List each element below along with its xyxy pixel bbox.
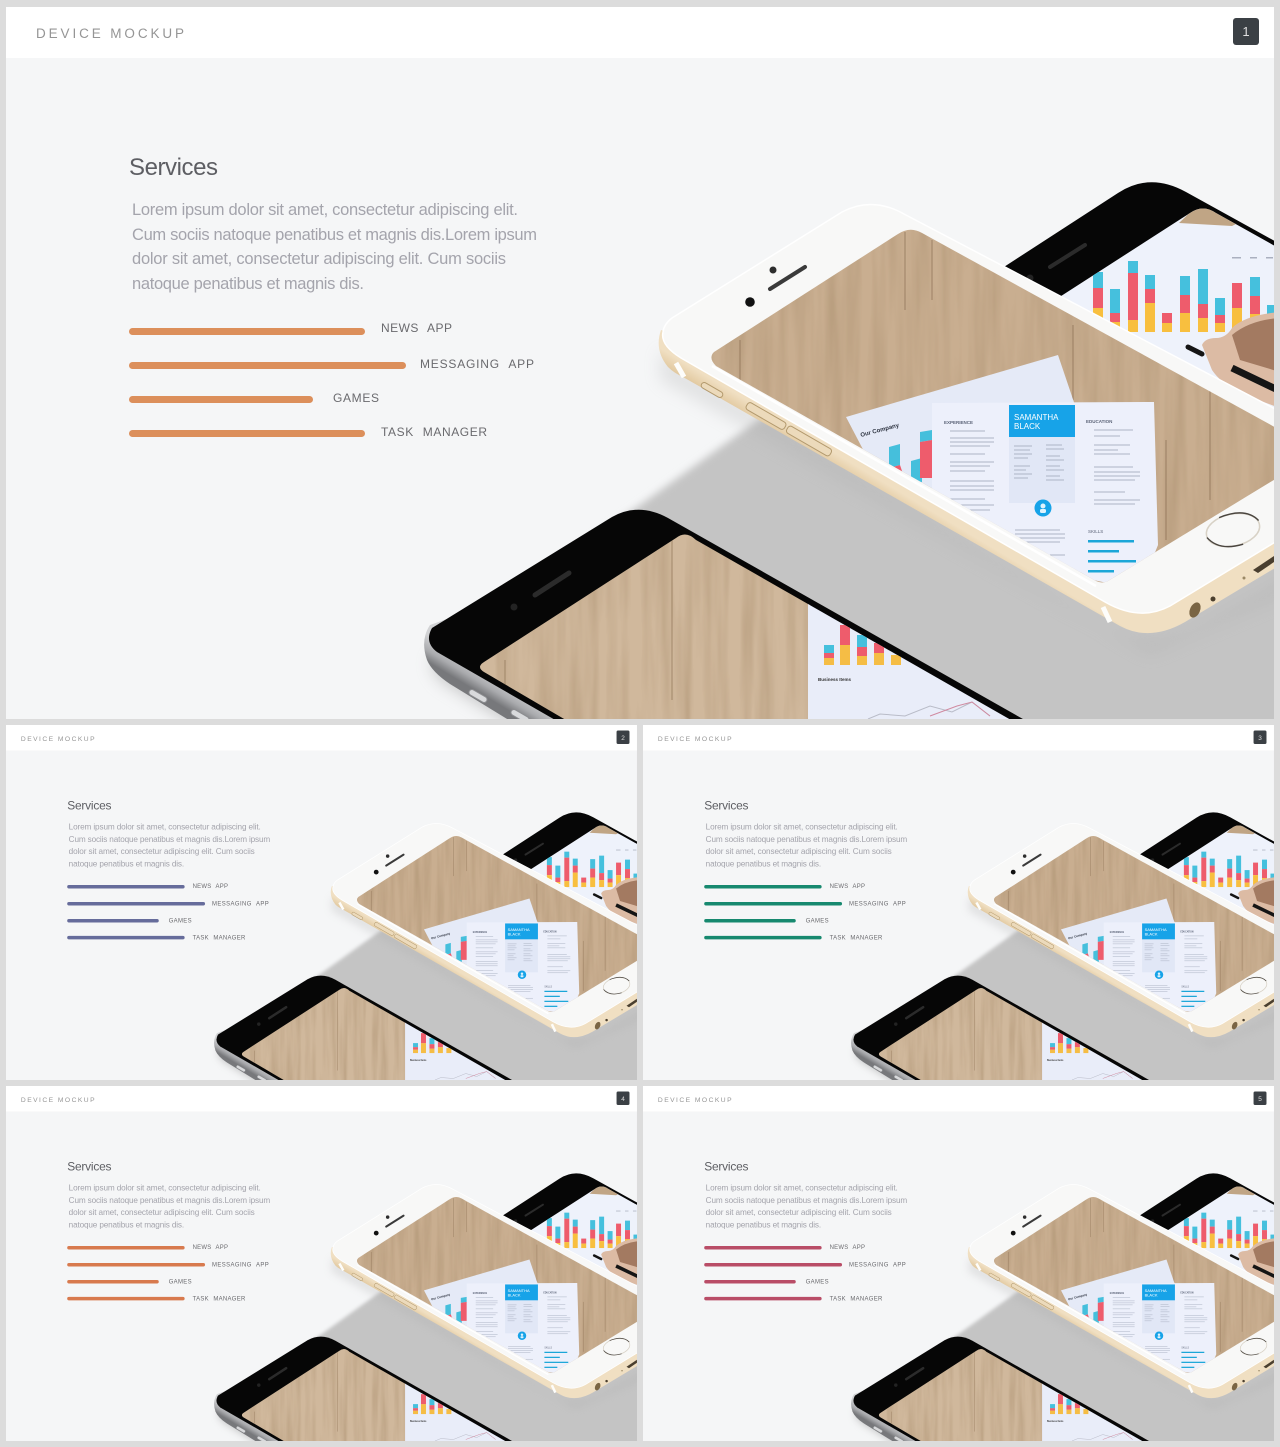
bar: news app: NEWS APP (381, 321, 452, 335)
body text (132, 201, 537, 293)
service bars list: NEWS APP (830, 1245, 865, 1251)
diagonal grey shadow (560, 400, 1280, 770)
body text: Lorem ipsum dolor sit amet, consectetur adipiscing elit. (69, 822, 261, 831)
home button (1203, 509, 1263, 551)
body text: natoque penatibus et magnis dis. (706, 1220, 821, 1229)
black phone, lower left: Business Items (818, 677, 852, 682)
body text: natoque penatibus et magnis dis. (706, 859, 821, 868)
body text: Cum sociis natoque penatibus et magnis dis.Lorem ipsum (706, 1196, 907, 1205)
service bars list: NEWS APP (193, 884, 228, 890)
body text: dolor sit amet, consectetur adipiscing elit. Cum sociis (706, 847, 892, 856)
bar: games: GAMES (333, 391, 379, 405)
gold phone: EDUCATION (1086, 419, 1112, 424)
black phone, lower left (424, 510, 1060, 740)
body text: Lorem ipsum dolor sit amet, consectetur adipiscing elit. (69, 1183, 261, 1192)
body text (69, 1183, 270, 1229)
service bars list: GAMES (806, 919, 829, 925)
body text: Lorem ipsum dolor sit amet, consectetur adipiscing elit. (706, 1183, 898, 1192)
slide 2: device mockup, indigo (6, 725, 665, 1105)
page number badge (1254, 1091, 1266, 1105)
page number badge: 4 (621, 1096, 625, 1103)
bar: task manager (129, 425, 487, 439)
bottom ports (1187, 601, 1203, 619)
slide 1: device mockup, orange (6, 7, 1280, 770)
gold phone: EXPERIENCE (944, 420, 973, 425)
header bar: DEVICE MOCKUP (658, 1097, 732, 1104)
bar: games (129, 391, 379, 405)
page number badge: 2 (621, 735, 625, 742)
illustration: isometric phones (851, 812, 1280, 1105)
body text: natoque penatibus et magnis dis. (69, 1220, 184, 1229)
header bar (6, 1086, 637, 1111)
illustration: isometric phones (214, 1173, 665, 1447)
header bar (643, 1086, 1274, 1111)
header bar: DEVICE MOCKUP (658, 736, 732, 743)
service bars list: NEWS APP (193, 1245, 228, 1251)
heading: Services (67, 1160, 112, 1174)
gold phone: Our Company (860, 423, 900, 439)
page number badge: 3 (1258, 735, 1262, 742)
heading: Services (704, 799, 749, 813)
service bars list: GAMES (806, 1280, 829, 1286)
heading: Services (704, 1160, 749, 1174)
service bars list: MESSAGING APP (849, 1263, 906, 1269)
service bars list: TASK MANAGER (830, 1297, 883, 1303)
gold phone: BLACK (1014, 422, 1041, 431)
earpiece and camera (770, 267, 805, 289)
service bars list (704, 1245, 906, 1303)
service bars list: NEWS APP (830, 884, 865, 890)
header bar: DEVICE MOCKUP (36, 26, 184, 41)
body text: Cum sociis natoque penatibus et magnis dis.Lorem ipsum (69, 835, 270, 844)
gold phone: SAMANTHA (1014, 413, 1059, 422)
slide 5: device mockup, crimson (643, 1086, 1280, 1447)
service bars list (67, 1245, 269, 1303)
gold phone: SKILLS (1088, 529, 1103, 534)
body text (706, 1183, 907, 1229)
page number badge (617, 730, 629, 744)
service bars list (704, 884, 906, 942)
body text (706, 822, 907, 868)
body text: dolor sit amet, consectetur adipiscing elit. Cum sociis (69, 847, 255, 856)
illustration: isometric phones (851, 1173, 1280, 1447)
bar: news app (129, 321, 452, 335)
slide 4: device mockup, burnt orange (6, 1086, 665, 1447)
body text: Cum sociis natoque penatibus et magnis dis.Lorem ipsum (706, 835, 907, 844)
service bars list: MESSAGING APP (212, 902, 269, 908)
page number badge (1254, 730, 1266, 744)
illustration: isometric phones (424, 182, 1280, 770)
page number badge (617, 1091, 629, 1105)
black phone, upper right (990, 182, 1280, 440)
service bars list: GAMES (169, 919, 192, 925)
service bars list: TASK MANAGER (193, 936, 246, 942)
page number badge (1233, 18, 1259, 45)
illustration: isometric phones (214, 812, 665, 1105)
bar: task manager: TASK MANAGER (381, 425, 487, 439)
service bars list (67, 884, 269, 942)
bar: messaging app: MESSAGING APP (420, 357, 534, 371)
side buttons and antenna bands (700, 381, 833, 457)
body text: dolor sit amet, consectetur adipiscing elit. Cum sociis (706, 1208, 892, 1217)
page number badge: 1 (1242, 24, 1250, 39)
body text (69, 822, 270, 868)
heading: Services (129, 154, 218, 181)
header bar: DEVICE MOCKUP (21, 736, 95, 743)
header bar (6, 725, 637, 750)
body text: dolor sit amet, consectetur adipiscing elit. Cum sociis (132, 250, 506, 268)
pen tip (1188, 347, 1202, 354)
service bars list (129, 321, 534, 439)
heading: Services (67, 799, 112, 813)
soft shadow of gold phone (660, 350, 1280, 655)
service bars list: MESSAGING APP (212, 1263, 269, 1269)
body text: Cum sociis natoque penatibus et magnis dis.Lorem ipsum (69, 1196, 270, 1205)
body text: natoque penatibus et magnis dis. (132, 275, 364, 293)
hand holding pen (1202, 312, 1280, 410)
slide background (6, 7, 1274, 719)
service bars list: GAMES (169, 1280, 192, 1286)
body text: Cum sociis natoque penatibus et magnis dis.Lorem ipsum (132, 226, 537, 244)
body text: Lorem ipsum dolor sit amet, consectetur adipiscing elit. (706, 822, 898, 831)
bar: messaging app (129, 357, 534, 371)
body text: Lorem ipsum dolor sit amet, consectetur adipiscing elit. (132, 201, 518, 219)
slide 3: device mockup, green (643, 725, 1280, 1105)
service bars list: MESSAGING APP (849, 902, 906, 908)
header bar (643, 725, 1274, 750)
service bars list: TASK MANAGER (193, 1297, 246, 1303)
service bars list: TASK MANAGER (830, 936, 883, 942)
page number badge: 5 (1258, 1096, 1262, 1103)
header bar: DEVICE MOCKUP (21, 1097, 95, 1104)
gold phone (659, 204, 1280, 633)
body text: natoque penatibus et magnis dis. (69, 859, 184, 868)
header bar (6, 7, 1274, 58)
body text: dolor sit amet, consectetur adipiscing elit. Cum sociis (69, 1208, 255, 1217)
